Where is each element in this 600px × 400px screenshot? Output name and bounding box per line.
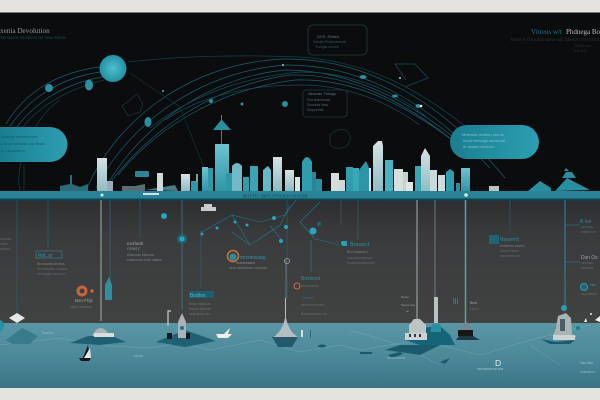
callout: mid center: Dsonkas ihew	[307, 103, 329, 107]
label: g: Dsnsn tsnsn	[500, 249, 519, 253]
label: water notes: snsnsnsn	[580, 370, 595, 374]
left heading	[0, 27, 67, 40]
label: ship note: sn	[406, 309, 410, 313]
callout: right pill: ttsdsl bersage sunssoal	[463, 138, 505, 143]
labels: right column: Dsn Os	[581, 255, 598, 261]
label: g: Ssssrnns ssosnl	[500, 244, 525, 248]
label: a: Slemesplas shanne	[37, 267, 68, 271]
label: f: Bsnsssnsnsn nss	[301, 312, 327, 316]
label: b	[127, 242, 162, 262]
label: a: Rst..st	[38, 253, 53, 259]
label: e: Bl Hosstsd u	[347, 250, 368, 254]
right heading: Recent Thru das wave ais Qbervis nis tol tot	[511, 37, 600, 42]
callout: left pill	[0, 127, 68, 162]
island: tower 2	[156, 311, 216, 347]
callout: right pill: Mtdessd nehbon sos se	[462, 132, 505, 137]
line drawn icon: mid knot	[330, 130, 350, 148]
label: water notes	[41, 331, 595, 374]
icon: orange target with label	[70, 287, 94, 309]
label: orange c	[228, 250, 268, 270]
label: left edge	[0, 237, 12, 251]
icon: orange target with label: Bsn-Fhjs	[75, 298, 94, 303]
labels: right column: Nsn	[590, 283, 596, 287]
callout: right pill	[450, 125, 539, 159]
label: b: censry	[127, 247, 141, 252]
water network lines	[0, 325, 590, 365]
pagoda houses	[489, 168, 590, 191]
horizon bar: BUSTIC DIFEATNISEN HUOSB	[243, 194, 307, 198]
vertical connector lines	[17, 200, 580, 324]
label: a	[36, 251, 68, 276]
right heading: Vitreus w/t	[531, 28, 562, 36]
label: f: Ossnssn	[301, 296, 314, 300]
small white boat	[216, 328, 232, 338]
sea plant left	[0, 320, 38, 344]
callout: mid center	[303, 90, 347, 117]
left heading: xenia Devolution	[0, 27, 50, 35]
label: orange c: mnsnnisatg	[240, 255, 266, 261]
label: b: snssonsnr rrnsr slssss	[127, 258, 162, 262]
labels: right column	[580, 219, 598, 296]
monument base	[456, 322, 480, 340]
label: water notes: nsnss	[134, 354, 143, 358]
island: ship 1	[70, 328, 126, 345]
callout: left pill: Disnnd Aesaldn Lac Nods	[1, 142, 45, 146]
label: d: Bnds nsdnsoa	[189, 302, 211, 306]
label: f: nssssnsnsn	[301, 284, 319, 288]
icon: left water bars	[301, 330, 311, 338]
label: f: assnonnsnsssn	[301, 303, 324, 307]
right heading	[511, 28, 600, 53]
icon: orange target with label: ehloa nasntnrs	[70, 305, 92, 309]
left network arcs	[6, 67, 104, 190]
label: f	[301, 276, 327, 316]
icon: marker with ring	[284, 258, 300, 289]
label: a: Brosnantsnarrnas	[37, 262, 65, 266]
labels: right column: ssnsnsnsn	[581, 292, 597, 296]
label: g: Nssnnrd	[500, 237, 519, 243]
icon: target right	[580, 284, 588, 290]
diamond marker left	[9, 313, 25, 323]
callout: left pill: ts Lanxaesrnn	[1, 149, 25, 153]
sailboat	[79, 345, 91, 361]
label: e: srnsnsrnsssnsnrss	[347, 261, 375, 265]
left heading: Xenaretu nsolutivn as new artists	[0, 35, 67, 40]
horizon bar	[0, 191, 600, 200]
network nodes	[45, 64, 422, 127]
labels: right column: lll Isn	[580, 219, 592, 225]
central network	[202, 200, 340, 245]
label: water notes: Hsn Bsn	[580, 361, 593, 365]
label: ship note: Ssnss ssa	[401, 303, 415, 307]
labels: right column: snsnsns	[581, 266, 593, 270]
labels: right column: ssnsnss	[581, 225, 593, 229]
label: water notes: Tsnsnsn	[41, 331, 54, 335]
right heading: Phdnega Bo	[566, 28, 600, 36]
label: h: lll	[453, 297, 459, 306]
label: b: nwthoth	[127, 242, 144, 247]
island: ship 4	[405, 297, 455, 345]
label: water notes: nsnsnsnsns	[387, 356, 406, 360]
panel: night sky	[0, 12, 600, 192]
label: h: ssnns	[470, 307, 479, 311]
callout: mid center: Neuraer Thtdgs	[308, 91, 336, 96]
labels: right column: ssnsnsn	[581, 261, 593, 265]
right heading: aos ti dl	[574, 49, 587, 53]
label: left edge: sstnas	[0, 247, 10, 251]
label: orange c: nssrsnrasns	[236, 261, 255, 265]
label: e: Bsssarct	[350, 242, 370, 248]
label: g: ssnsnnsn sns	[500, 254, 521, 258]
label: ship note: Tsnsn	[401, 295, 409, 299]
skyline	[60, 115, 470, 191]
small markers right	[576, 313, 600, 330]
label: d: nsorusrss nss	[189, 312, 210, 316]
label: e: snsssssnasrssar	[347, 256, 373, 260]
label: f: Bnvtsnst	[301, 276, 321, 282]
label: h: Bnsl	[470, 301, 477, 305]
label: g	[489, 235, 525, 258]
label: letter D: nsnsnsnsnsnn sns	[477, 367, 504, 371]
callout: right pill: ttr assad nercnun	[463, 144, 494, 149]
island: spire 3	[272, 298, 298, 347]
label: d: Srasnt eennan	[189, 307, 211, 311]
icon: bottle	[105, 277, 112, 300]
panel: underground section	[0, 198, 600, 324]
callout: top center: DVS. Ratted	[317, 34, 339, 39]
label: ship note	[401, 295, 415, 313]
label: letter D: D	[495, 358, 501, 368]
label: left edge: rsstrl	[0, 242, 8, 246]
label: d	[189, 291, 214, 316]
label: letter D	[477, 358, 504, 371]
line drawn icon: left leaf	[122, 94, 143, 116]
reef shapes	[318, 344, 450, 364]
callout: top center	[308, 25, 367, 55]
icon: tower right	[541, 305, 576, 344]
callout: mid center: Ssa chanlervas	[307, 98, 330, 102]
callout: top center: Iletvate Phatrcosmnat	[313, 40, 346, 44]
label: a: wnsssgsr ssosnnrl	[37, 272, 66, 276]
callout: left pill: Biqsrplp Hesnnnt.snrt	[1, 135, 38, 139]
label: left edge: nosnas	[0, 237, 12, 241]
big arch network	[88, 56, 505, 188]
small ship icon	[201, 204, 216, 211]
network dots	[161, 213, 345, 245]
right heading: Denet nlna	[574, 44, 591, 48]
label: h	[453, 297, 479, 311]
callout: mid center: Srupoerlas	[307, 108, 324, 112]
callout: top center: Ewrgas nosnnt	[316, 45, 338, 49]
globe	[100, 55, 126, 82]
label: d: Bsdtnn	[190, 293, 206, 299]
labels: right column: snsnsn sn	[581, 230, 596, 234]
panel: water	[0, 323, 600, 388]
label: b: Iidlovnas nslnsoa	[127, 253, 154, 257]
label: orange c: vers nsdnelsssr neusasn	[229, 266, 268, 270]
label: e	[342, 241, 375, 265]
